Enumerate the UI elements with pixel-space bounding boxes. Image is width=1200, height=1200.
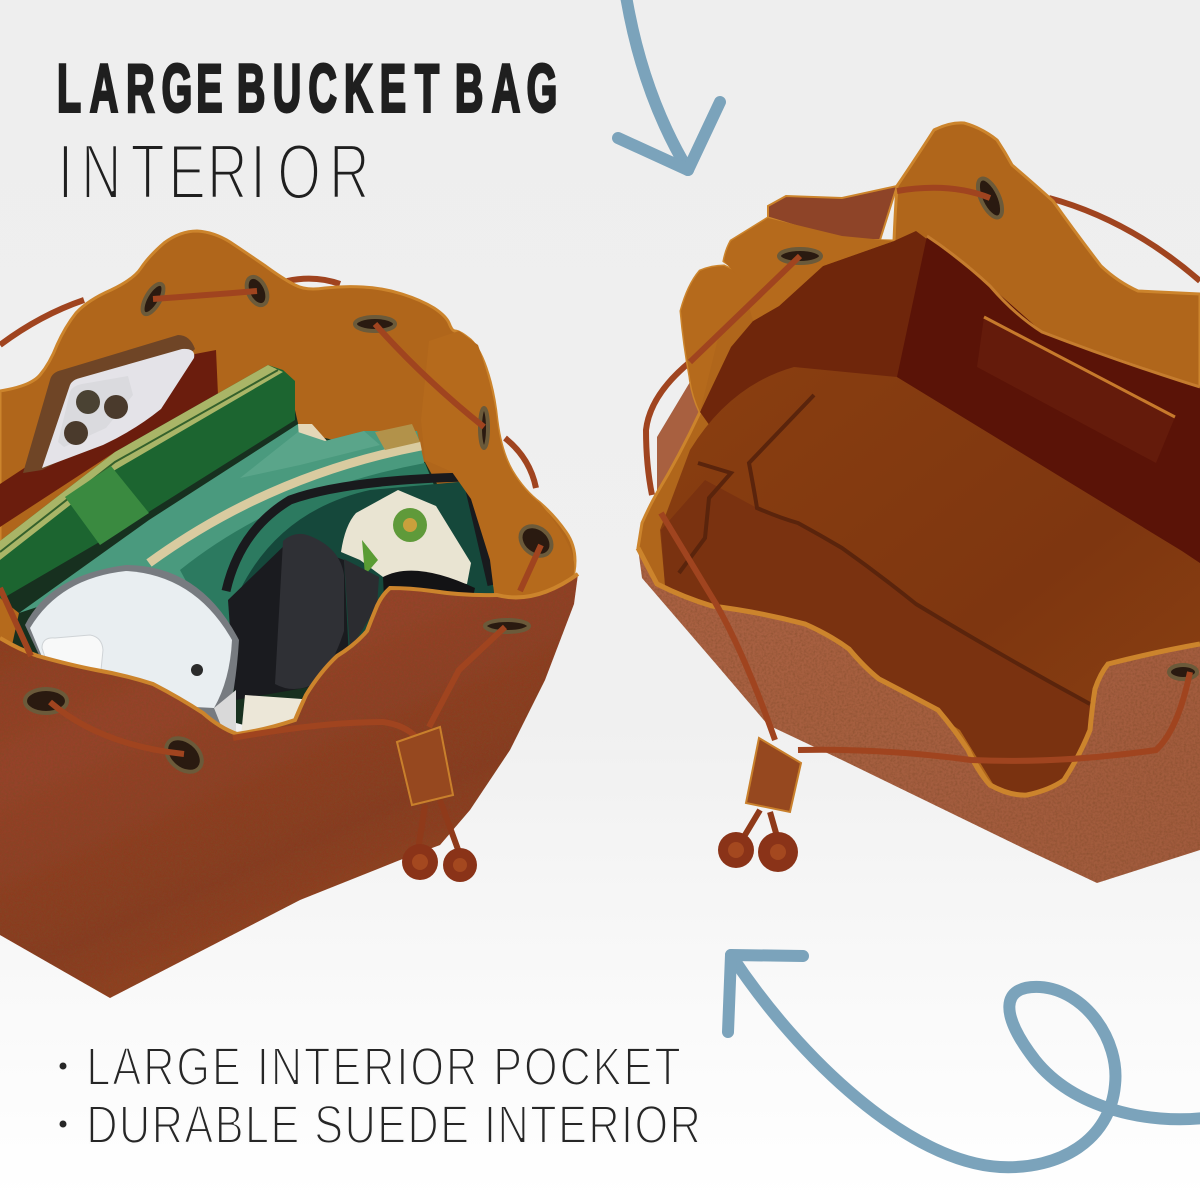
title	[57, 50, 557, 216]
notebook strap	[65, 466, 149, 545]
left bag drawstring	[0, 291, 541, 754]
left bag: open bag with contents	[0, 231, 578, 998]
pocket welt	[977, 317, 1175, 463]
right inner flap	[421, 331, 574, 600]
arrow: bottom looping curve	[728, 955, 1200, 1167]
left bag front leather	[0, 574, 578, 998]
teal book and pouch	[19, 424, 440, 690]
right bag second flap	[724, 218, 894, 321]
bullet 2: DURABLE SUEDE INTERIOR	[86, 1096, 701, 1155]
left bag leather rim	[0, 574, 578, 734]
heading: interior: INTERIOR	[58, 128, 370, 216]
headphones	[228, 534, 475, 700]
right bag leather rim	[638, 548, 1200, 795]
phone case	[23, 335, 195, 473]
right bag floor	[660, 367, 1200, 795]
right bag side leather	[657, 382, 700, 493]
left bag inner shadow	[0, 410, 495, 740]
heading: large bucket bag: LARGE BUCKET BAG	[57, 50, 557, 126]
right bag cord toggle	[718, 738, 801, 872]
arrow: top pointing down into right bag	[618, 0, 720, 170]
left small flap	[0, 598, 19, 650]
right bag rear leather lip	[768, 186, 897, 240]
bullet 1: LARGE INTERIOR POCKET	[86, 1038, 681, 1097]
headphone band	[226, 477, 492, 591]
right bag handle cord back	[646, 191, 1200, 495]
right bag suede wall	[638, 123, 1200, 795]
tumbler	[25, 565, 239, 734]
patterned scarf	[341, 490, 471, 584]
phone	[42, 349, 194, 468]
right bag: empty interior	[638, 123, 1200, 883]
inner dark green lining	[240, 480, 495, 700]
feature list	[60, 1038, 701, 1155]
right bag lower floor band	[661, 480, 1090, 795]
right bag left flap	[681, 266, 752, 412]
green notebook	[0, 365, 295, 600]
right bag dark rear wall	[700, 231, 1200, 600]
left bag suede interior	[0, 231, 575, 720]
interior pocket	[897, 236, 1200, 563]
left bag cord toggle	[397, 727, 477, 882]
left bag handle cord back	[0, 279, 536, 488]
cream cloth	[241, 695, 306, 736]
red leather phone pocket	[0, 350, 218, 527]
right bag eyelets	[779, 175, 1197, 679]
right bag front leather	[638, 548, 1200, 883]
right bag floor seams	[679, 395, 1090, 704]
left bag eyelets	[25, 274, 557, 779]
right bag drawstring	[661, 188, 1190, 761]
